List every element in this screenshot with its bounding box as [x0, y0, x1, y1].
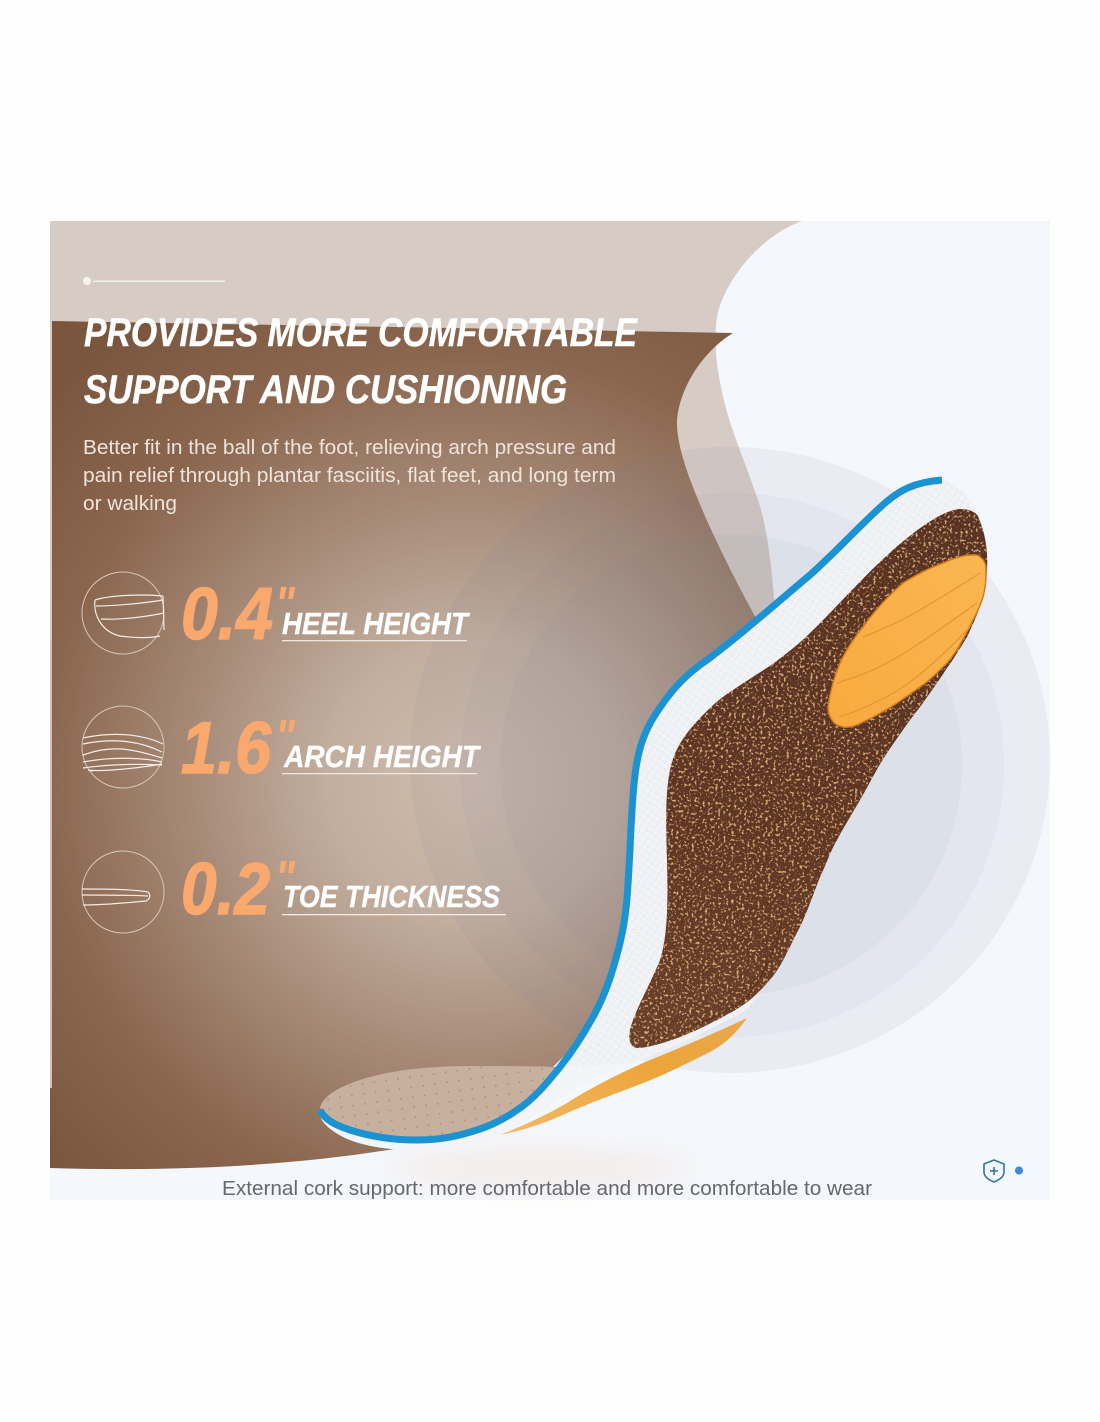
heel height stat [181, 574, 471, 655]
arch height stat [181, 708, 482, 789]
title [84, 311, 638, 412]
taupe wave shape [50, 221, 802, 640]
description text [83, 436, 616, 515]
cork forefoot contour [693, 903, 783, 1025]
left edge strip [50, 640, 52, 1088]
toe thickness stat [181, 849, 506, 930]
caption: External cork support: more comfortable and more comfortable to wear [222, 1177, 872, 1200]
orange heel pad [828, 555, 986, 727]
toe thickness value: 0.2 [181, 849, 270, 930]
icon: heel height [82, 572, 164, 654]
toe thickness inch mark: " [275, 852, 296, 905]
cork base [620, 500, 1000, 1060]
icon: toe thickness [82, 851, 164, 933]
background panel [50, 221, 1050, 1200]
toe leather top [320, 1066, 556, 1137]
orange arch wedge [500, 1018, 747, 1135]
blue foam edge [320, 480, 942, 1140]
heel height value: 0.4 [181, 574, 273, 655]
brown gradient shape [50, 321, 757, 1169]
heel height inch mark: " [275, 578, 296, 631]
description text: Better fit in the ball of the foot, relieving arch pressure and [83, 436, 616, 459]
insole product illustration [320, 480, 1000, 1150]
heel pad ridges [837, 573, 980, 717]
soft shadow under toe [390, 1152, 690, 1184]
arch height label: ARCH HEIGHT [283, 739, 482, 774]
icon: shield with plus [984, 1160, 1004, 1182]
insole white base [320, 480, 977, 1150]
cork speckle [620, 500, 1000, 1060]
arch height value: 1.6 [181, 708, 271, 789]
decorative line with dot [83, 277, 225, 285]
title: SUPPORT AND CUSHIONING [84, 368, 567, 412]
description text: or walking [83, 492, 177, 515]
heel height label: HEEL HEIGHT [282, 606, 471, 641]
description text: pain relief through plantar fasciitis, flat feet, and long term [83, 464, 616, 487]
arch height inch mark: " [275, 711, 296, 764]
blue dot [1015, 1166, 1023, 1174]
concentric background circles [410, 447, 1050, 1073]
toe thickness label: TOE THICKNESS [283, 879, 500, 914]
title: PROVIDES MORE COMFORTABLE [84, 311, 638, 355]
icon: arch height [82, 706, 164, 788]
toe perforations [320, 1066, 556, 1137]
insole mesh texture [560, 480, 977, 1067]
